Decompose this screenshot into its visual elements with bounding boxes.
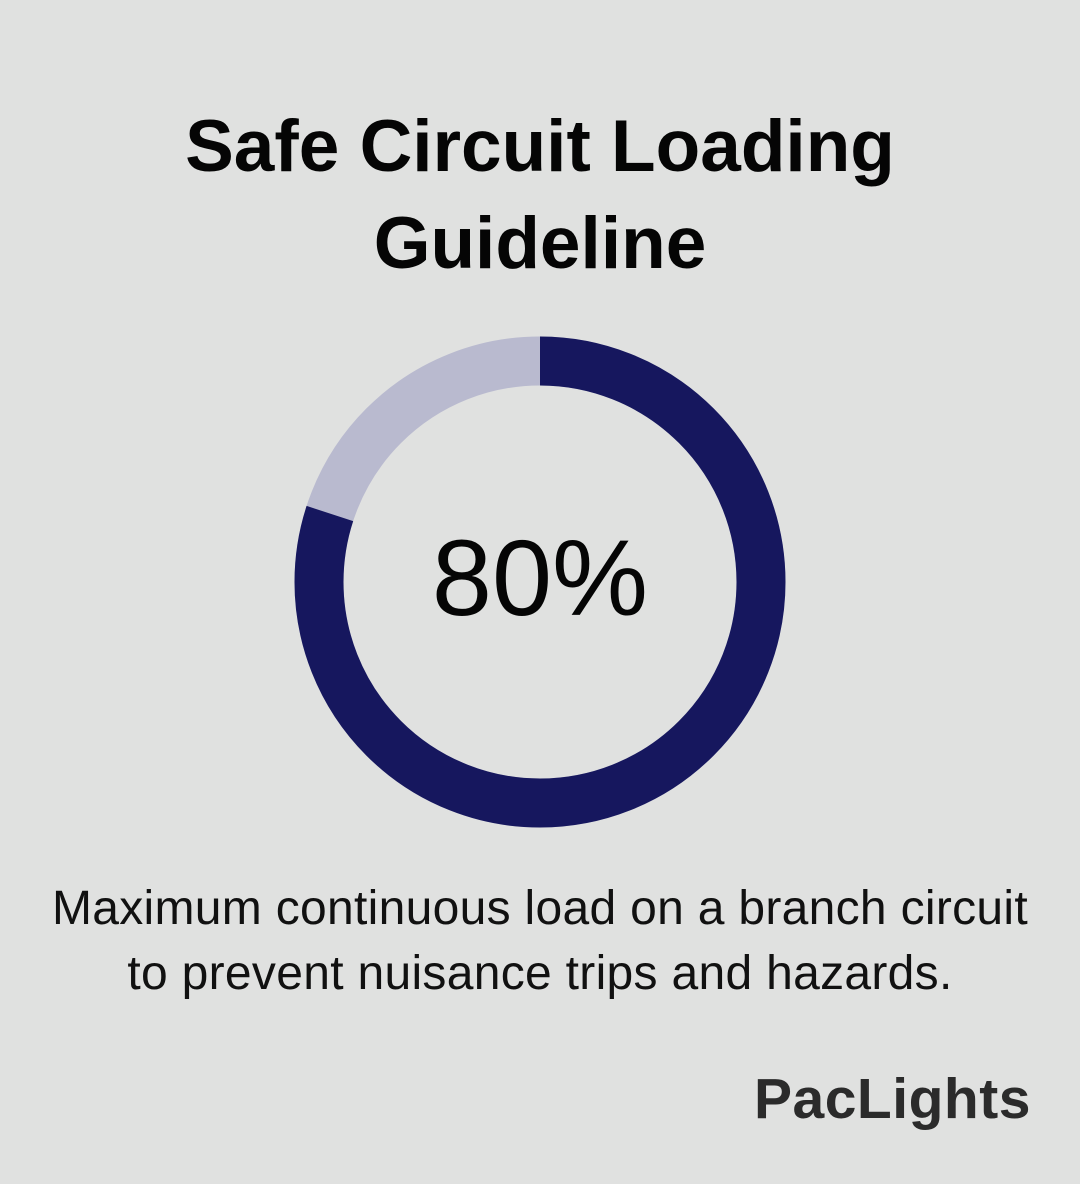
- title: Guideline: [374, 203, 706, 284]
- logo: PacLights: PacLights: [754, 1067, 1031, 1131]
- description text: [52, 882, 1028, 1000]
- dark 80% arc: [319, 361, 761, 803]
- percentage value: 80%: [432, 517, 648, 638]
- description text: to prevent nuisance trips and hazards.: [127, 947, 953, 1000]
- title: Safe Circuit Loading: [185, 106, 895, 187]
- light remainder ring: [319, 361, 761, 803]
- description text: Maximum continuous load on a branch circuit: [52, 882, 1028, 935]
- donut chart: [294, 336, 786, 828]
- title: [185, 106, 895, 284]
